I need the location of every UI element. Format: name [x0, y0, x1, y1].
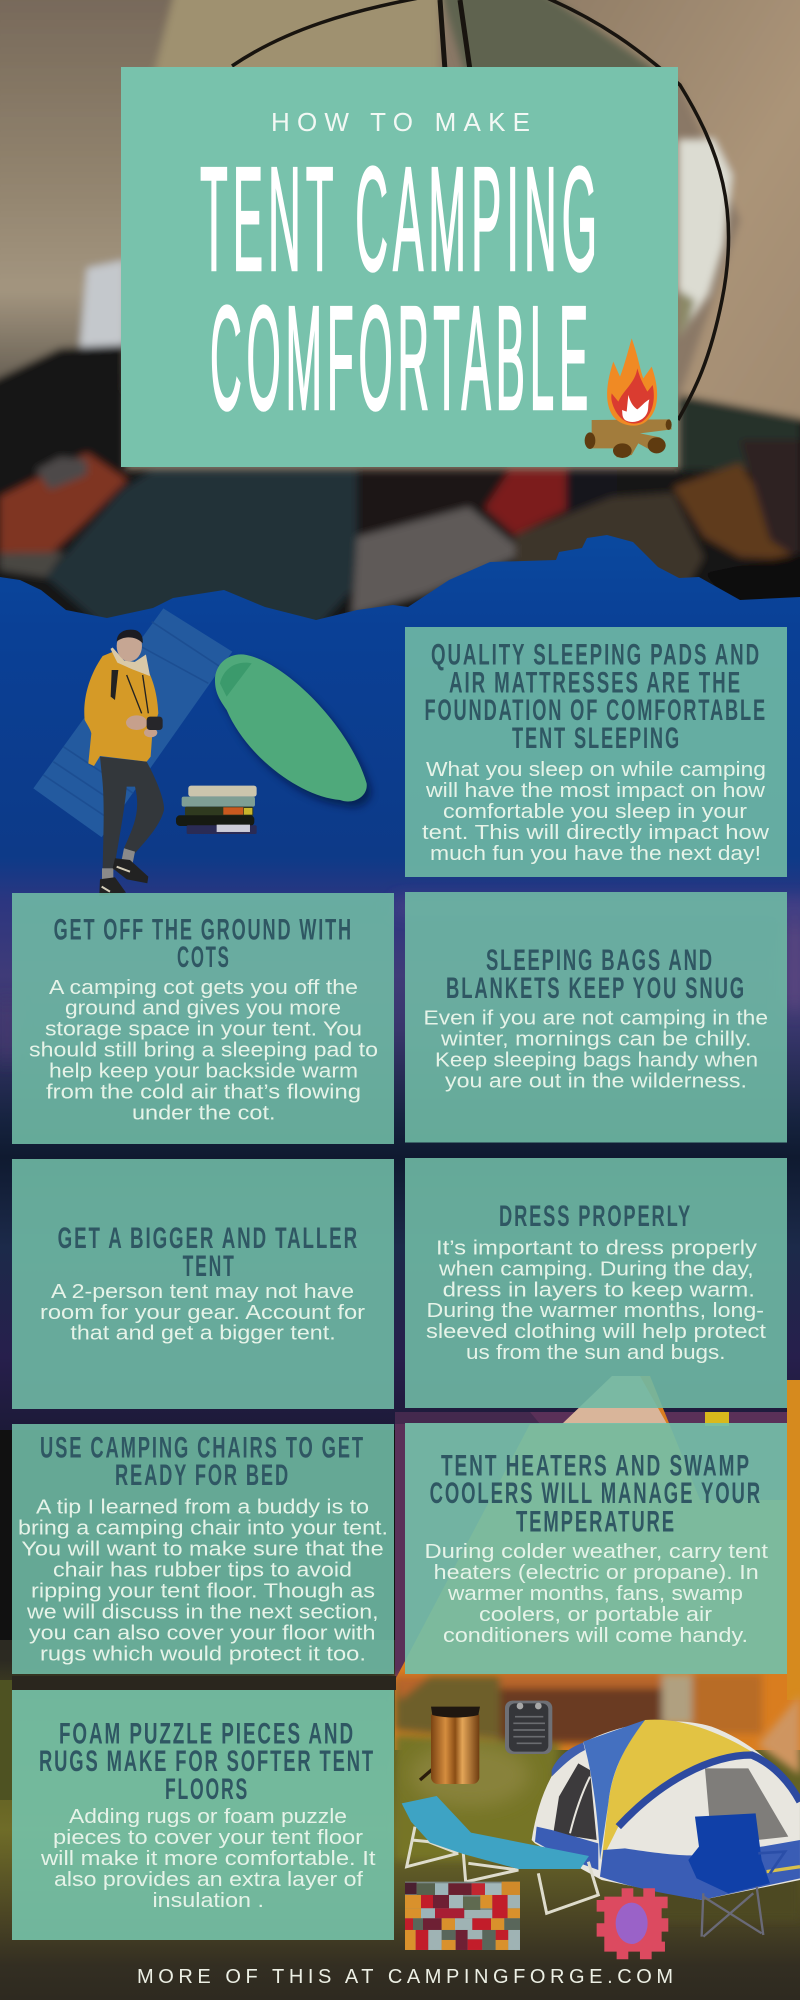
body text: During the warmer months, long- [426, 1299, 764, 1322]
icon: patchwork rug [405, 1882, 520, 1950]
body text: storage space in your tent. You [45, 1018, 362, 1041]
icon: sleeping pad [33, 608, 232, 837]
body text: will have the most impact on how [425, 779, 765, 802]
body text: should still bring a sleeping pad to [29, 1039, 378, 1062]
body text: chair has rubber tips to avoid [53, 1558, 352, 1581]
heading: TEMPERATURE [516, 1506, 676, 1539]
heading [39, 1717, 375, 1806]
body text: comfortable you sleep in your [443, 800, 747, 823]
heading [58, 1222, 359, 1283]
body text: Even if you are not camping in the [424, 1007, 768, 1030]
heading: COTS [177, 941, 231, 974]
body text: During colder weather, carry tent [424, 1540, 768, 1563]
heading [446, 944, 746, 1005]
body text: from the cold air that’s flowing [46, 1081, 361, 1104]
background: blue mountain sky [0, 535, 800, 1430]
body text: Adding rugs or foam puzzle [69, 1805, 347, 1828]
panel: dress properly [405, 1158, 787, 1408]
body text: Keep sleeping bags handy when [435, 1048, 758, 1072]
heading [430, 1449, 762, 1539]
body text: us from the sun and bugs. [466, 1341, 726, 1364]
illustration: man with sleeping pad, sleeping bag and blankets [33, 608, 371, 896]
body text: ground and gives you more [65, 997, 341, 1020]
body text: you can also cover your floor with [29, 1621, 376, 1644]
body text: help keep your backside warm [49, 1060, 358, 1083]
title heading [200, 137, 602, 441]
body text: much fun you have the next day! [430, 842, 761, 865]
body text: What you sleep on while camping [426, 758, 766, 781]
icon: blue camping chair [688, 1813, 785, 1937]
heading: RUGS MAKE FOR SOFTER TENT [39, 1745, 375, 1778]
heading: FOAM PUZZLE PIECES AND [59, 1717, 355, 1750]
body text [40, 1805, 376, 1912]
body text: under the cot. [132, 1102, 276, 1125]
panel: heaters and coolers [405, 1423, 787, 1674]
body text: heaters (electric or propane). In [434, 1561, 759, 1584]
body text: warmer months, fans, swamp [447, 1582, 743, 1605]
body text: dress in layers to keep warm. [443, 1278, 755, 1301]
illustration: heaters, cot, rug, foam mat, tent and chair [402, 1701, 800, 1959]
background: dusk glow [0, 900, 800, 1060]
icon: stack of blankets [176, 786, 257, 834]
icon: dome tent [532, 1720, 800, 1900]
icon: folding cot [402, 1796, 598, 1913]
heading: READY FOR BED [115, 1459, 290, 1492]
body text: ripping your tent floor. Though as [31, 1579, 375, 1602]
heading [424, 639, 767, 755]
panel: sleeping bags [405, 892, 787, 1142]
body text [40, 1280, 365, 1345]
body text: A camping cot gets you off the [49, 976, 358, 999]
body text [424, 1540, 768, 1647]
body text: room for your gear. Account for [40, 1301, 365, 1324]
body text [424, 1007, 768, 1092]
title kicker: HOW TO MAKE [271, 107, 530, 137]
body text: A tip I learned from a buddy is to [36, 1495, 369, 1518]
footer text: MORE OF THIS AT CAMPINGFORGE.COM [137, 1966, 673, 1988]
body text: tent. This will directly impact how [422, 821, 769, 844]
body text [422, 758, 769, 865]
body text: sleeved clothing will help protect [426, 1320, 766, 1343]
body text: that and get a bigger tent. [70, 1322, 336, 1345]
body text: you are out in the wilderness. [445, 1070, 747, 1092]
heading [54, 913, 353, 974]
body text [18, 1495, 388, 1665]
body text [426, 1236, 766, 1364]
heading [40, 1432, 365, 1492]
heading: USE CAMPING CHAIRS TO GET [40, 1432, 365, 1465]
body text: A 2-person tent may not have [51, 1280, 354, 1303]
icon: sleeping bag [215, 654, 371, 807]
icon: campfire [585, 338, 672, 458]
panel: sleeping pads [405, 627, 787, 877]
heading: GET A BIGGER AND TALLER [58, 1222, 359, 1255]
body text: we will discuss in the next section, [26, 1600, 379, 1623]
panel: camping chairs [12, 1424, 394, 1674]
body text: when camping. During the day, [438, 1257, 754, 1280]
body text: insulation . [152, 1889, 264, 1912]
heading: TENT [183, 1250, 236, 1283]
heading: TENT SLEEPING [512, 722, 681, 755]
heading: FLOORS [165, 1773, 249, 1806]
body text: pieces to cover your tent floor [53, 1826, 363, 1849]
panel: cots [12, 893, 394, 1144]
title panel [121, 67, 678, 467]
body text: It’s important to dress properly [436, 1236, 758, 1260]
background: orange tent and grass photo [0, 1376, 800, 2000]
body text [29, 976, 378, 1125]
icon: fan heater [505, 1701, 552, 1754]
body text: will make it more comfortable. It [40, 1847, 376, 1870]
panel: bigger tent [12, 1159, 394, 1409]
body text: coolers, or portable air [479, 1603, 712, 1626]
body text: conditioners will come handy. [443, 1624, 748, 1647]
background: tent interior photo [0, 0, 800, 640]
icon: hiker in yellow jacket [84, 630, 164, 896]
body text: bring a camping chair into your tent. [18, 1516, 388, 1539]
heading: GET OFF THE GROUND WITH [54, 913, 353, 946]
body text: also provides an extra layer of [54, 1868, 363, 1891]
icon: bronze heater [420, 1707, 480, 1784]
body text: rugs which would protect it too. [40, 1642, 366, 1665]
body text: You will want to make sure that the [21, 1537, 384, 1560]
icon: foam puzzle mat [597, 1888, 668, 1959]
panel: foam puzzle pieces [12, 1690, 394, 1940]
body text: winter, mornings can be chilly. [440, 1028, 752, 1050]
